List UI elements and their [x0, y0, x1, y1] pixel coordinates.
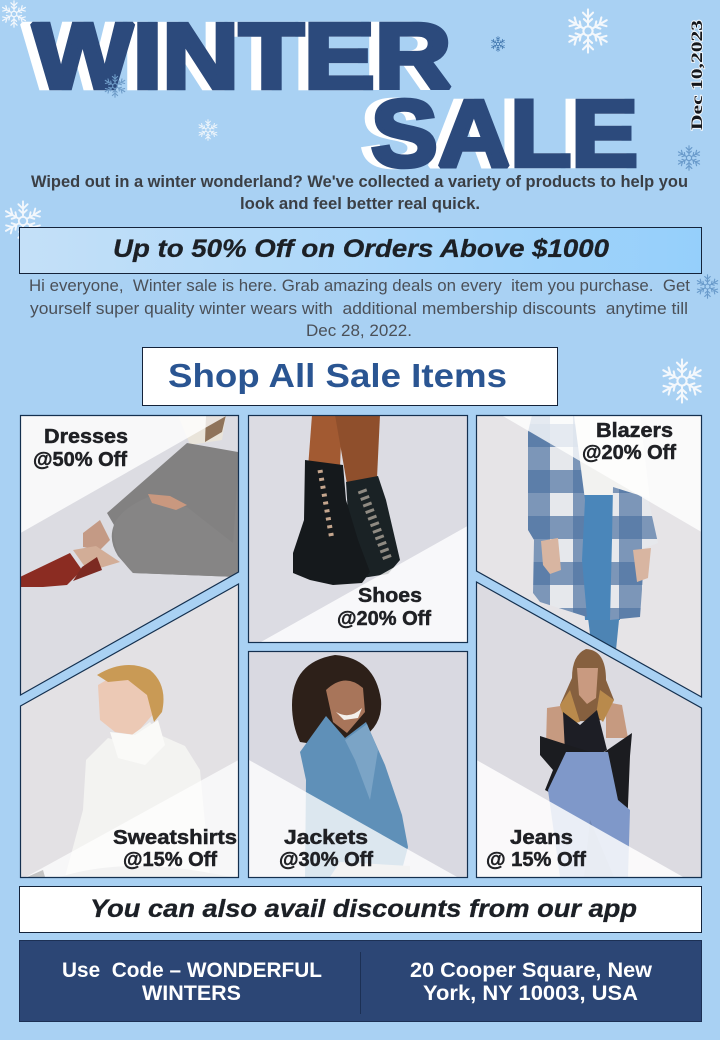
banner: offer: Up to 50% Off on Orders Above $1000 [113, 235, 609, 263]
photo: woman in denim jacket [292, 655, 410, 877]
title: SALE: SALE [361, 81, 628, 187]
panel: blazers [476, 415, 702, 697]
address: York, NY 10003, USA [423, 982, 638, 1005]
heading button: shop all: Shop All Sale Items [168, 357, 507, 394]
text block: announcement: Hi everyone, Winter sale is here. Grab amazing deals on every item you purchase. Get [29, 276, 690, 295]
white corner [476, 760, 684, 878]
intro text: look and feel better real quick. [240, 194, 480, 213]
heading button: shop all [142, 348, 558, 406]
photo: woman in jeans [540, 649, 632, 877]
label: blazers: @20% Off [582, 442, 676, 464]
label: dresses: Dresses [44, 426, 128, 448]
white corner [502, 416, 702, 532]
text block: announcement: Dec 28, 2022. [306, 321, 412, 340]
panel: shoes [248, 415, 468, 642]
title: WINTER: WINTER [32, 4, 451, 108]
white corner [260, 526, 468, 642]
panel: sweatshirts [20, 584, 238, 878]
label: shoes [337, 585, 431, 630]
icon: snowflakes [1, 1, 719, 403]
intro text: Wiped out in a winter wonderland? We've collected a variety of products to help you [31, 172, 688, 191]
text block: announcement [29, 276, 690, 340]
label: blazers [582, 420, 676, 464]
label: sweatshirts: Sweatshirts [113, 827, 237, 849]
panel: dresses [20, 415, 238, 695]
text block: announcement: yourself super quality winter wears with additional membership discounts anytime till [30, 299, 688, 318]
address: 20 Cooper Square, New [410, 959, 653, 982]
photo: black boots [293, 415, 400, 585]
label: shoes: Shoes [358, 585, 422, 607]
label: jeans: @ 15% Off [486, 849, 586, 871]
title: WINTER: WINTER [22, 4, 441, 108]
title: SALE: SALE [371, 81, 638, 187]
label: jackets: Jackets [284, 827, 368, 849]
callout: app discounts [20, 886, 702, 932]
label: jackets [279, 827, 373, 871]
white corner [25, 760, 238, 878]
label: sweatshirts [113, 827, 237, 871]
label: sweatshirts: @15% Off [123, 849, 217, 871]
banner: offer [20, 228, 702, 274]
label: dresses: @50% Off [33, 449, 127, 471]
footer panel [20, 940, 702, 1022]
white corner [20, 416, 227, 533]
promo code [62, 959, 322, 1005]
label: jeans: Jeans [510, 827, 573, 849]
panel: jeans [476, 582, 702, 878]
label: jeans [486, 827, 586, 871]
photo: woman in white sweater [27, 665, 201, 877]
date: Dec 10,2023 [689, 20, 706, 130]
promo code: Use Code – WONDERFUL [62, 959, 322, 982]
photo: woman in grey dress [20, 415, 238, 587]
white corner [249, 760, 458, 878]
label: dresses [33, 426, 128, 471]
panel: jackets [248, 652, 468, 878]
label: shoes: @20% Off [337, 608, 431, 630]
label: blazers: Blazers [596, 420, 673, 442]
promo code: WINTERS [142, 982, 241, 1005]
photo: checked coat [528, 415, 658, 650]
intro text [31, 172, 688, 213]
address [410, 959, 653, 1005]
label: jackets: @30% Off [279, 849, 373, 871]
callout: app discounts: You can also avail discounts from our app [90, 895, 637, 923]
